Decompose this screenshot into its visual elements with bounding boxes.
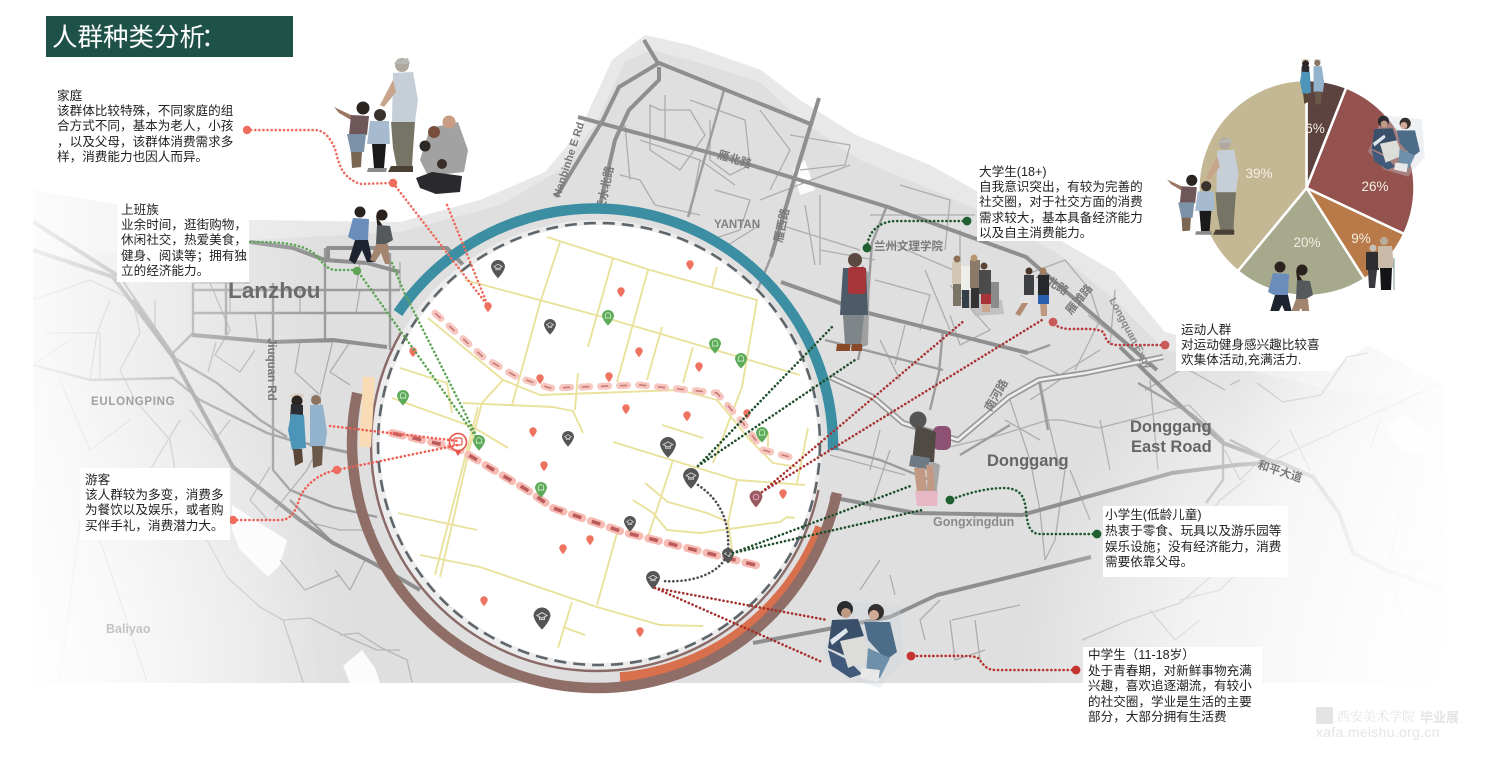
map labels: 雁西路: [771, 206, 792, 244]
text: sports crowd: 运动人群: [1181, 323, 1232, 337]
pie labels: 39%: [1245, 166, 1273, 181]
figures: sports group 1: [952, 254, 1004, 316]
text: tourists: 买伴手礼，消费潜力大。: [85, 518, 224, 533]
connector: between schools: [663, 485, 728, 581]
watermark: 毕业展: [1420, 710, 1459, 725]
arc: high school students: [620, 527, 820, 677]
medium roads: [33, 40, 1274, 543]
edge fades: [33, 190, 294, 682]
text: middle school students: 处于青春期，对新鲜事物充满: [1088, 663, 1252, 678]
watermark: [1316, 707, 1459, 740]
map pins: orange: [409, 260, 787, 637]
arc: outer brown: [352, 393, 837, 688]
text: sports crowd: 欢集体活动,充满活力.: [1181, 352, 1301, 367]
map labels: Donggang: [1130, 418, 1212, 436]
text: pupils: [1103, 506, 1288, 577]
slice 39%: [1199, 80, 1306, 271]
map labels: 雁北路: [1034, 268, 1072, 298]
pie labels: 20%: [1293, 235, 1321, 250]
arc: tourist segment: [365, 377, 369, 447]
map labels: 雁滩路: [1063, 281, 1096, 317]
arc: college students: [398, 209, 833, 450]
text: family: 该群体比较特殊，不同家庭的组: [57, 103, 234, 118]
figures: college student with backpack: [836, 253, 870, 351]
map labels: YANTAN: [714, 219, 760, 231]
figures: middle school students: [823, 600, 904, 688]
text: pupils: 需要依靠父母。: [1105, 555, 1193, 569]
text: commuters: 业余时间，逛街购物，: [121, 217, 247, 232]
slice 26%: [1306, 88, 1414, 234]
title: [46, 16, 293, 57]
icon: bus stop: [450, 434, 466, 456]
map pins: schools: [491, 260, 762, 630]
text: family: 样，消费能力也因人而异。: [57, 150, 208, 164]
map labels: 和平大道: [1256, 458, 1305, 485]
pie figure: commuters: [1268, 262, 1313, 319]
dashed boundary: [378, 223, 820, 665]
inner darker land: [284, 51, 1206, 683]
map land: [96, 35, 1364, 390]
south river road: [830, 357, 1163, 440]
figures: commuter couple: [348, 206, 393, 264]
map labels: 雁北路: [716, 147, 754, 171]
text: middle school students: [1083, 647, 1262, 724]
map labels: Jiuquan Rd: [265, 338, 277, 401]
thick roads: [33, 40, 1274, 590]
text: family: 家庭: [57, 88, 83, 103]
connector: college students: [698, 217, 971, 466]
map labels: 南河路: [981, 376, 1011, 414]
text: sports crowd: [1176, 311, 1330, 371]
text: tourists: [80, 468, 230, 540]
text: pupils: 小学生(低龄儿童): [1105, 507, 1202, 522]
basemap: [33, 35, 1443, 683]
text: middle school students: 中学生（11-18岁）: [1088, 647, 1195, 662]
thin streets: [33, 262, 400, 682]
text: middle school students: 的社交圈，学业是生活的主要: [1088, 694, 1252, 709]
watermark: 西安美术学院: [1337, 709, 1415, 724]
slice 20%: [1238, 188, 1364, 296]
text: commuters: 立的经济能力。: [121, 263, 209, 278]
text: college students: [977, 163, 1146, 241]
highway east: [830, 460, 1369, 562]
map labels: Gongxingdun: [933, 515, 1014, 529]
pie chart: [1167, 59, 1425, 319]
slice 6%: [1306, 80, 1346, 188]
slice 9%: [1306, 188, 1404, 279]
text: pupils: 娱乐设施；没有经济能力，消费: [1105, 540, 1281, 555]
text: tourists: 该人群较为多变，消费多: [85, 487, 224, 502]
map labels: East Road: [1131, 438, 1212, 456]
study area circle: [352, 209, 837, 688]
connector: commuters: [250, 242, 479, 441]
pie labels: 9%: [1351, 231, 1371, 246]
text: college students: 以及自主消费能力。: [979, 226, 1092, 240]
pie figure: tourists: [1300, 59, 1324, 105]
connector: tourists: [229, 426, 458, 524]
text: college students: 社交圈，对于社交方面的消费: [979, 194, 1143, 209]
pie figure: family: [1167, 138, 1238, 235]
figures: girl on roller skates: [909, 412, 951, 506]
figures: sports group 2: [1015, 268, 1049, 316]
text: commuters: 上班族: [121, 203, 159, 217]
connector: pupils: [733, 485, 1101, 553]
text: commuters: [117, 202, 249, 282]
figures: family grandpa and children: [334, 58, 418, 172]
figures: tourists: [288, 394, 327, 468]
figures: seated family: [416, 116, 468, 194]
text: pupils: 热衷于零食、玩具以及游乐园等: [1105, 523, 1282, 538]
pedestrian route: upper: [435, 313, 790, 457]
connector: family: [243, 126, 488, 306]
text: college students: 大学生(18+): [979, 164, 1047, 179]
inner thin ring: [371, 332, 818, 671]
pie labels: 6%: [1305, 121, 1325, 136]
text: family: 合方式不同，基本为老人，小孩: [57, 118, 234, 133]
connector: sports crowd: [762, 318, 1169, 492]
blank patches: [232, 160, 815, 683]
text: tourists: 为餐饮以及娱乐，或者购: [85, 502, 224, 517]
text: commuters: 休闲社交，热爱美食，: [121, 232, 247, 247]
text: middle school students: 兴趣，喜欢追逐潮流，有较小: [1088, 678, 1252, 693]
pie figure: elderly couple: [1366, 237, 1394, 290]
text: middle school students: 部分，大部分拥有生活费: [1088, 710, 1227, 724]
map pins: green: [397, 310, 768, 498]
pie labels: [1245, 121, 1389, 250]
connector: middle school students: [655, 588, 1080, 674]
map labels: Lanzhou: [228, 278, 320, 303]
pie labels: 26%: [1361, 179, 1389, 194]
map labels: Nanbinhe E Rd: [551, 121, 587, 199]
text: family: [57, 88, 234, 164]
text: sports crowd: 对运动健身感兴趣比较喜: [1181, 337, 1320, 352]
text: family: ，以及父母，该群体消费需求多: [57, 135, 233, 149]
local street network: [392, 237, 808, 648]
pie figure: students: [1368, 115, 1425, 177]
map labels: 兰州文理学院: [874, 239, 943, 253]
map labels: [91, 121, 1305, 636]
text: commuters: 健身、阅读等；拥有独: [121, 248, 247, 264]
text: college students: 需求较大，基本具备经济能力: [979, 211, 1143, 225]
map labels: EULONGPING: [91, 396, 175, 408]
pedestrian route: lower: [392, 433, 763, 567]
map labels: 天水北路: [593, 164, 617, 213]
map labels: Baliyao: [106, 622, 151, 636]
map labels: Donggang: [987, 452, 1069, 470]
title: 人群种类分析：: [52, 24, 227, 52]
watermark: xafa.meishu.org.cn: [1316, 724, 1440, 740]
map labels: Longquan Expy: [1106, 296, 1154, 371]
text: tourists: 游客: [85, 472, 111, 487]
text: college students: 自我意识突出，有较为完善的: [979, 179, 1143, 194]
